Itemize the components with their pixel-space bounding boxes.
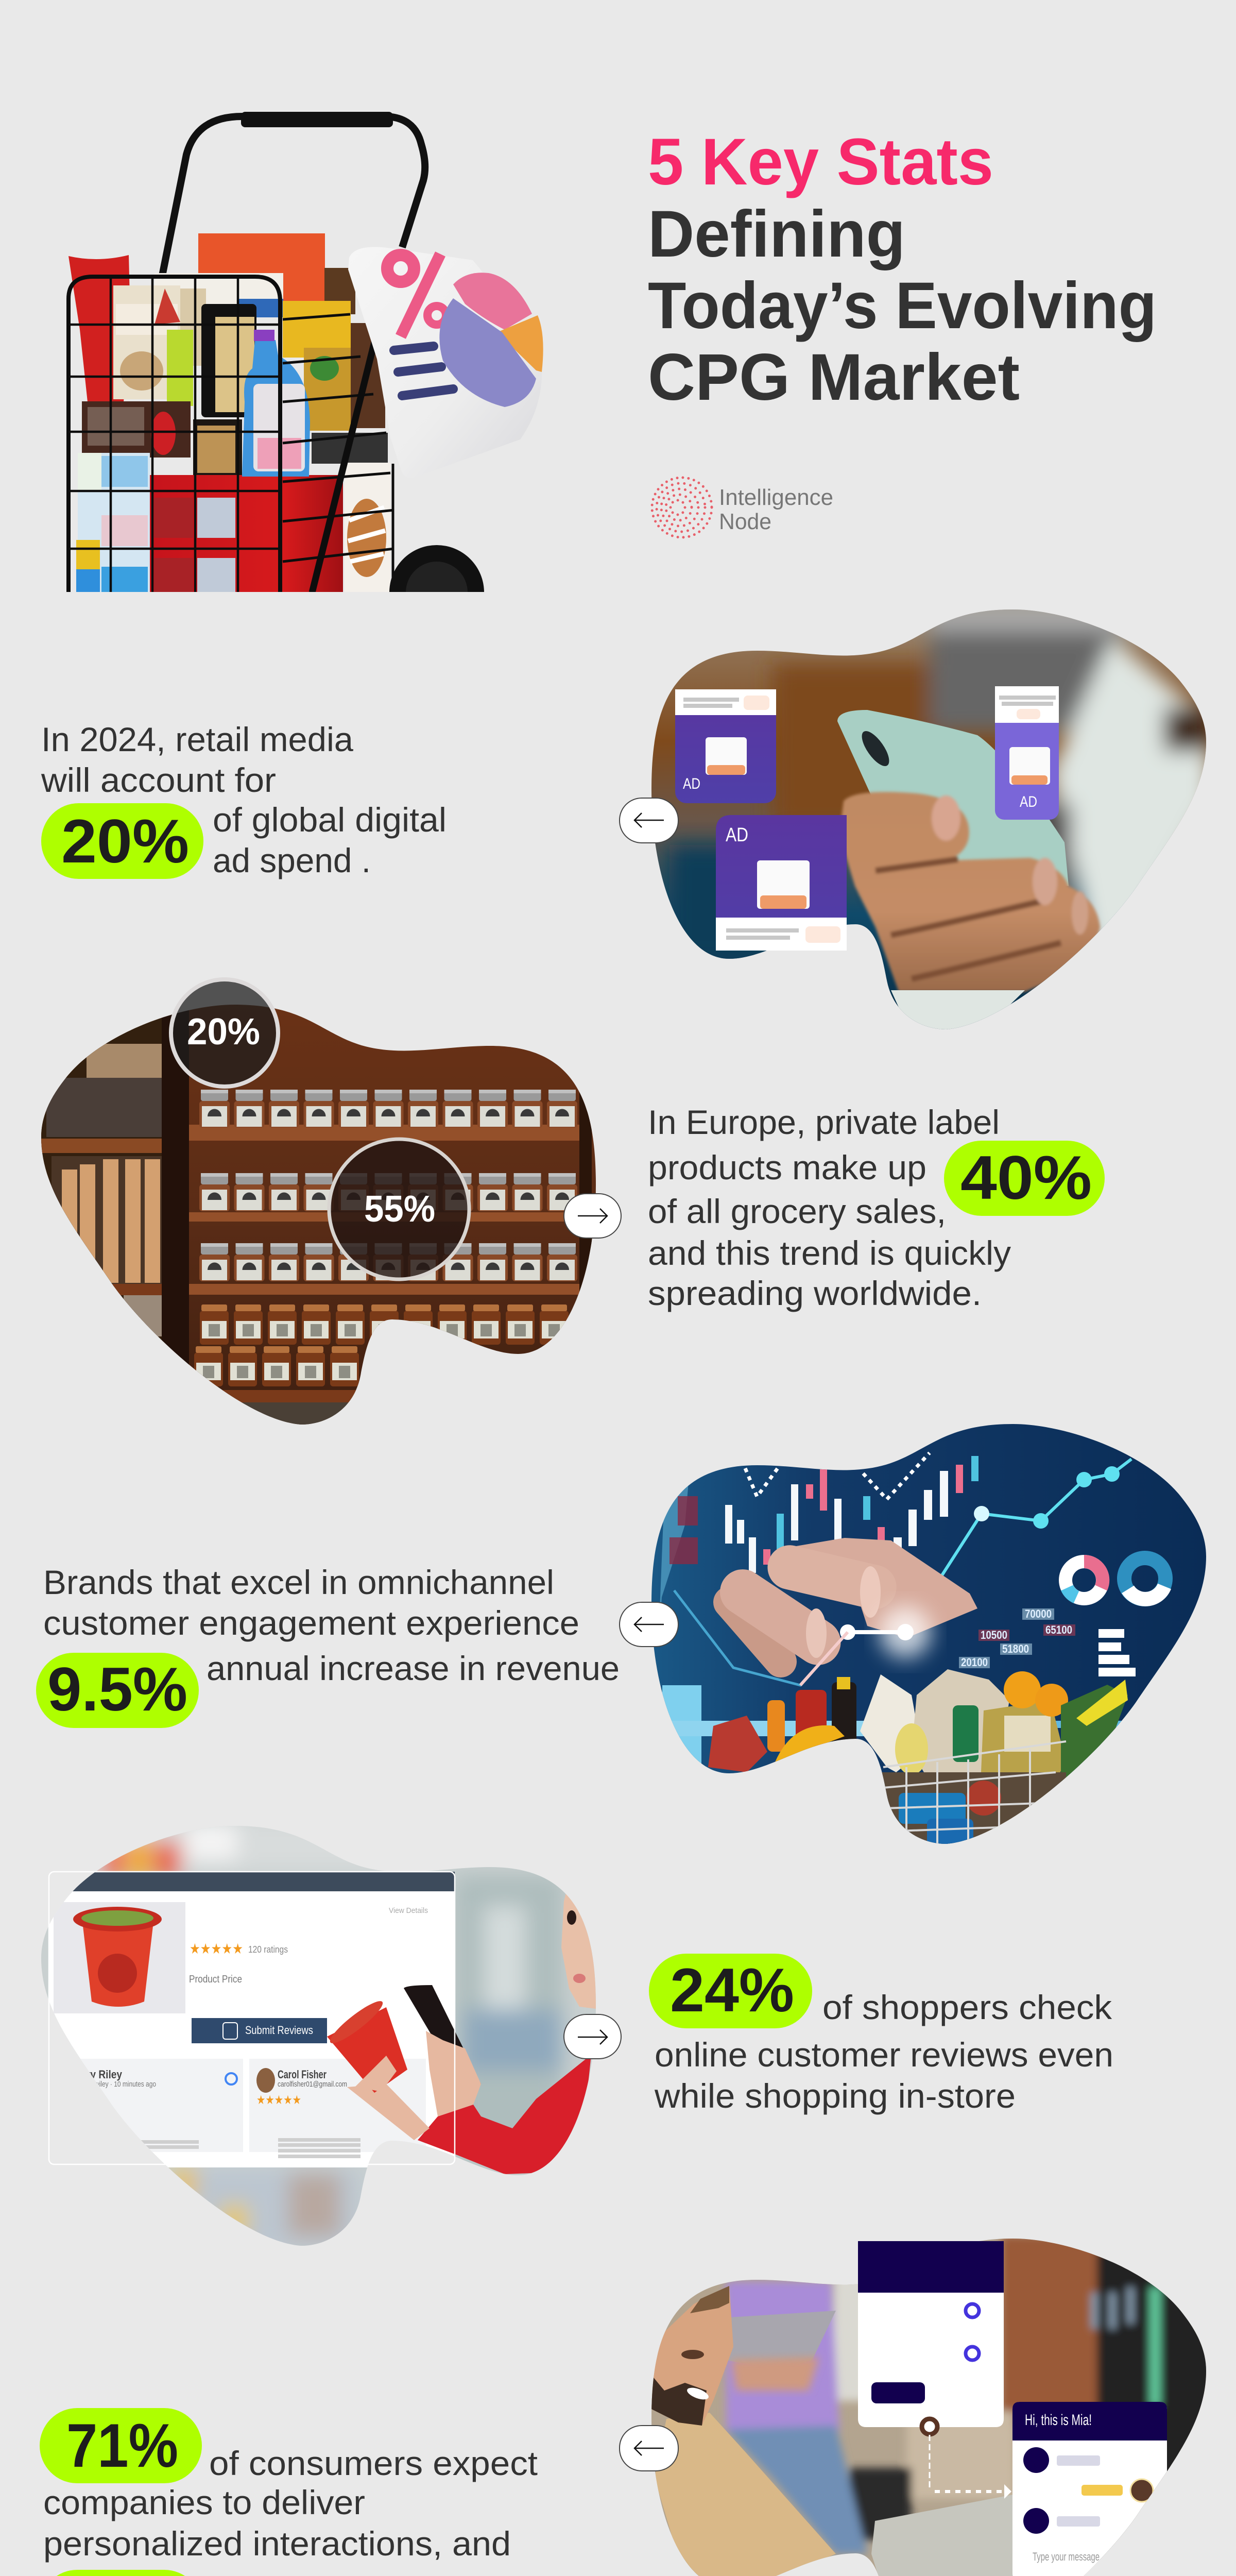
donut charts	[1066, 1558, 1165, 1599]
stat 1 text: ad spend .	[213, 841, 371, 879]
title: Today’s Evolving	[648, 269, 1157, 343]
stat 2 text: of all grocery sales,	[648, 1192, 946, 1230]
panel: stat 4 customer reviews	[31, 1819, 1113, 2251]
stat pill 24%: 24%	[670, 1956, 794, 2025]
arrow button left	[620, 1602, 678, 1647]
review card: Riley	[67, 2059, 243, 2152]
stat 2 text: products make up	[648, 1148, 926, 1187]
chat panel: Type your message	[1033, 2550, 1100, 2563]
photo: man and colleague with chat	[644, 2236, 1215, 2576]
stat pill 71%: 71%	[66, 2411, 178, 2480]
data labels: 20100	[961, 1656, 988, 1669]
stat 3 text: annual increase in revenue	[207, 1649, 620, 1687]
stat pill 9.5%: 9.5%	[47, 1655, 187, 1724]
stat 3 text: customer engagement experience	[43, 1604, 579, 1642]
data labels: 51800	[1002, 1642, 1029, 1655]
submit button	[192, 2018, 327, 2043]
badge 55%	[329, 1139, 469, 1279]
product cup	[73, 1907, 162, 2007]
cart wheel	[389, 545, 484, 592]
stat 2 text: In Europe, private label	[648, 1103, 1000, 1141]
3D percent and pie-chart card	[348, 247, 543, 478]
knit cuff	[891, 990, 1025, 1036]
ad card centre	[716, 815, 847, 951]
phone UI panel	[858, 2241, 1004, 2427]
stat 5 text: of consumers expect	[209, 2444, 538, 2482]
panel: stat 1 retail media	[41, 603, 1210, 1036]
logo: Intelligence Node: Intelligence	[719, 485, 833, 510]
stat 1 text: of global digital	[213, 801, 447, 839]
data labels: 70000	[1025, 1607, 1052, 1620]
arrow button right	[564, 2014, 621, 2059]
ad card right: AD	[1020, 793, 1037, 810]
review card: Carol Fisher: Carol Fisher	[278, 2068, 327, 2081]
stat 4 text: of shoppers check	[822, 1988, 1112, 2026]
cart wire frame	[68, 277, 394, 592]
stat pill 71%	[40, 2408, 202, 2483]
submit button: Submit Reviews	[245, 2024, 313, 2037]
badge 55%: 55%	[364, 1189, 435, 1230]
title	[648, 125, 1157, 414]
review card: Product Price	[189, 1974, 242, 1985]
percent glyph	[387, 254, 446, 336]
stat 1 text	[41, 720, 447, 879]
stat 4 text: while shopping in-store	[654, 2077, 1016, 2115]
stat pill 75%	[40, 2570, 202, 2576]
data labels: 10500	[981, 1629, 1007, 1641]
stat 4 text	[654, 1988, 1113, 2115]
logo: Intelligence Node: Node	[719, 509, 771, 534]
stat 5 text	[43, 2444, 577, 2576]
review card: Riley: wiley · 10 minutes ago	[94, 2080, 156, 2089]
arrow button left	[620, 798, 678, 843]
ad card left	[675, 689, 776, 803]
groceries	[708, 1669, 1128, 1834]
phone	[837, 710, 1069, 886]
growth line	[674, 1459, 1131, 1685]
stat pill 40%: 40%	[960, 1143, 1092, 1212]
review card	[49, 1872, 455, 2167]
title: CPG Market	[648, 341, 1020, 414]
stat 5 text: personalized interactions, and	[43, 2524, 511, 2563]
hand	[729, 1538, 977, 1685]
panel: stat 2 private label	[31, 979, 1105, 1437]
basket	[881, 1741, 1066, 1850]
review card: 120 ratings	[248, 1944, 288, 1955]
review card: ★★★★★	[190, 1941, 243, 1957]
photo: grocery shelves	[31, 994, 603, 1437]
ad card right	[995, 686, 1059, 820]
review card: Carol Fisher: carolfisher01@gmail.com	[278, 2080, 347, 2089]
data labels: 65100	[1045, 1623, 1072, 1636]
review card: View Details	[389, 1906, 428, 1915]
stat 5 text: companies to deliver	[43, 2483, 365, 2521]
photo: hand holding phone	[644, 603, 1210, 1036]
photo: shopper with review card	[31, 1819, 603, 2251]
card outline	[49, 1872, 455, 2164]
title: Defining	[648, 197, 905, 271]
stat pill 20%	[41, 803, 203, 879]
woman shopper	[326, 1886, 600, 2174]
stat 1 text: In 2024, retail media	[41, 720, 353, 758]
ad card centre: AD	[726, 824, 748, 846]
left column goods	[41, 1044, 162, 1336]
candlesticks	[725, 1453, 978, 1579]
ad card left: AD	[683, 775, 700, 792]
review card: Carol Fisher: ★★★★★	[256, 2093, 301, 2107]
title: 5 Key Stats	[648, 125, 993, 199]
cart handle	[162, 112, 425, 278]
hero: shopping cart illustration	[68, 112, 484, 640]
review card: Riley: ry Riley	[87, 2068, 123, 2081]
stat 2 text	[648, 1103, 1011, 1312]
stat 2 text: and this trend is quickly	[648, 1234, 1011, 1272]
arrow button right	[564, 1194, 621, 1238]
stat 3 text	[43, 1563, 620, 1687]
connector from phone to chat	[922, 2419, 1011, 2499]
stat 2 text: spreading worldwide.	[648, 1274, 982, 1312]
hand	[839, 792, 1100, 992]
arrow button left	[620, 2426, 678, 2471]
logo: Intelligence Node	[652, 478, 833, 537]
chat panel: Hi, this is Mia!	[1025, 2412, 1092, 2429]
stat pill 20%: 20%	[61, 807, 189, 876]
chat panel	[1012, 2402, 1167, 2576]
badge 20%	[171, 979, 278, 1087]
panel: stat 3 omnichannel	[36, 1417, 1210, 1850]
badge 20%: 20%	[187, 1011, 260, 1053]
stat 3 text: Brands that excel in omnichannel	[43, 1563, 554, 1601]
panel: stat 5 personalization	[40, 2236, 1215, 2576]
review card: Carol Fisher	[249, 2059, 426, 2158]
data labels	[959, 1607, 1075, 1669]
stat 1 text: will account for	[41, 761, 276, 799]
cart contents	[68, 233, 390, 592]
photo: market chart and basket	[644, 1417, 1210, 1850]
stat 4 text: online customer reviews even	[655, 2036, 1113, 2074]
